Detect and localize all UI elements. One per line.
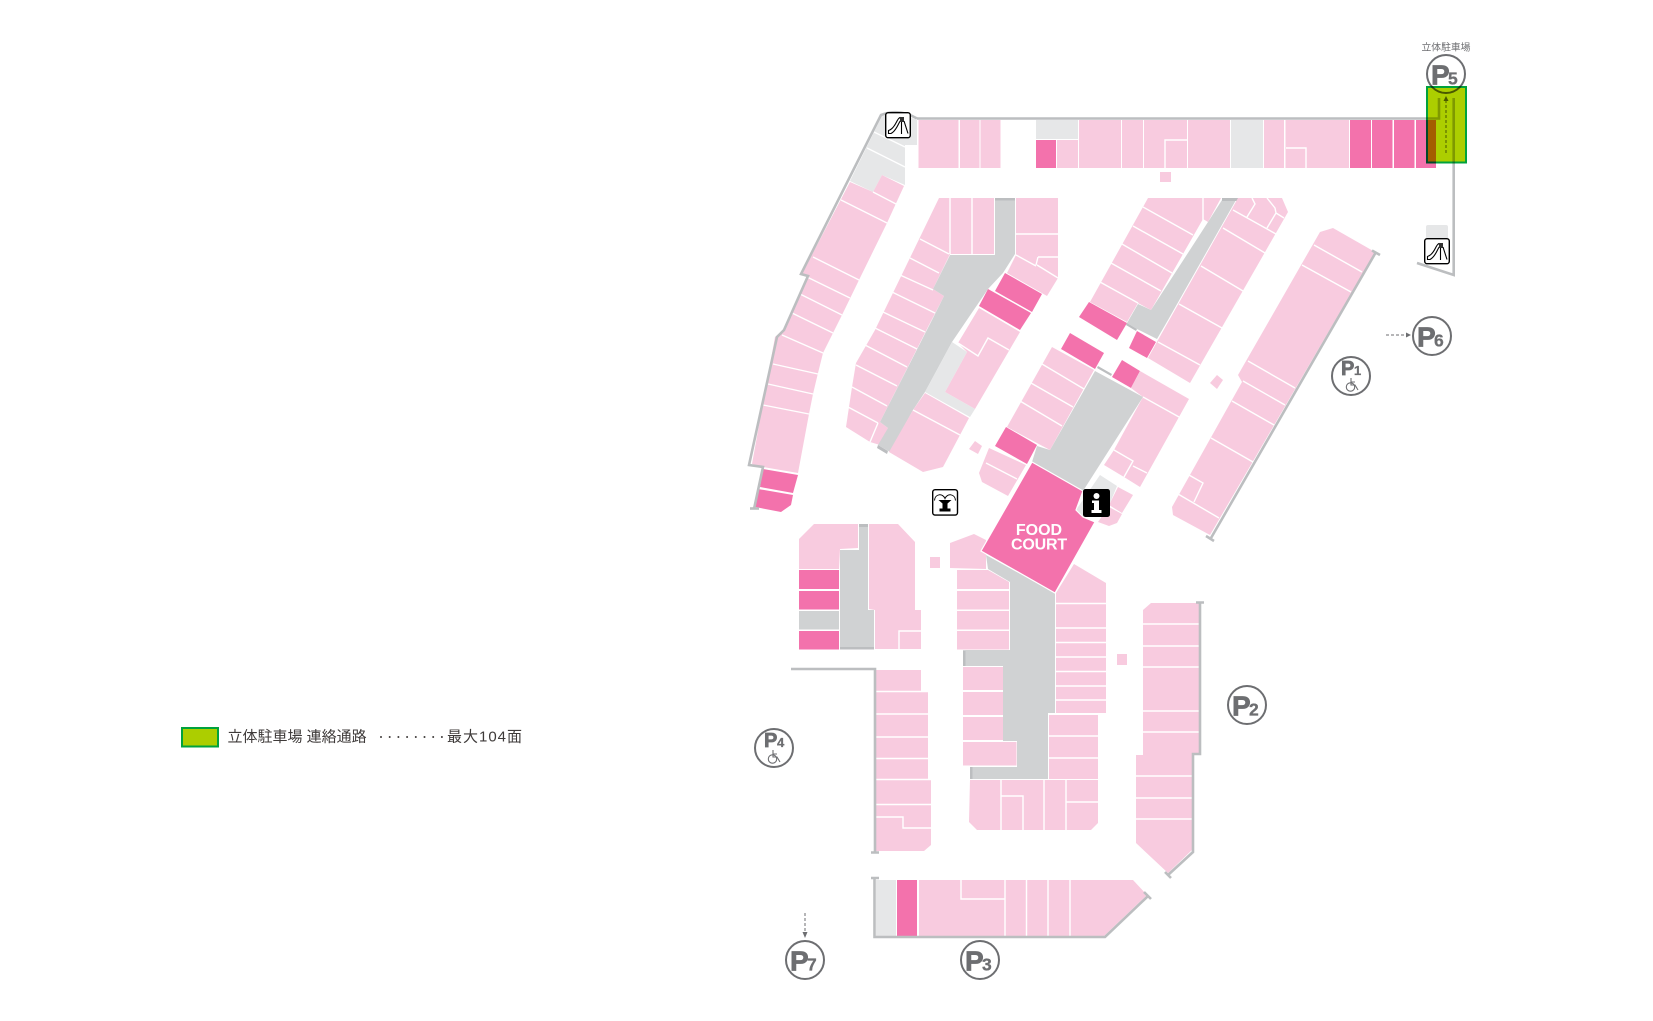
food court: [981, 462, 1095, 593]
legend: 立体駐車場 連絡通路: [228, 728, 367, 746]
right wing shops: [1172, 228, 1375, 535]
food court: FOOD: [1016, 522, 1062, 539]
sign: P5: P: [1431, 60, 1450, 90]
sign: P7: [786, 941, 824, 979]
icon: escalator east: [1425, 239, 1449, 264]
icon: information: [1083, 489, 1110, 517]
sign: P5: [1427, 55, 1465, 93]
left wing shops: [752, 112, 917, 512]
sign: P3: 3: [982, 954, 992, 974]
sign: P1 with wheelchair: [1332, 357, 1370, 395]
upper centre-right block: [979, 198, 1288, 496]
sign: P2: P: [1232, 690, 1251, 722]
east block: [1136, 603, 1199, 873]
sign: P2: [1228, 686, 1266, 724]
icon: fountain: [933, 490, 958, 515]
sign: P3: P: [965, 946, 984, 976]
arrow to P5: [1444, 96, 1448, 153]
sign: P1 with wheelchair: P: [1341, 358, 1354, 380]
P5 multi-storey car park label: 立体駐車場: [1422, 40, 1471, 54]
sign: P5: 5: [1448, 68, 1458, 88]
food court: COURT: [1011, 536, 1067, 554]
lower-left block: [799, 524, 940, 650]
south centre block: [950, 534, 1127, 830]
south strip: [876, 880, 1147, 936]
sign: P4 with wheelchair: [755, 729, 793, 767]
sign: P2: 2: [1249, 700, 1259, 720]
arrow to P6: [1386, 332, 1411, 338]
icon: escalator north-west: [886, 113, 910, 138]
legend: 最大104面: [447, 728, 522, 746]
information area: [1076, 475, 1133, 526]
upper centre-left block: [846, 198, 1058, 472]
legend: [182, 728, 522, 746]
building walls: [749, 98, 1454, 937]
sign: P3: [961, 941, 999, 979]
sign: P7: 7: [807, 954, 817, 974]
green connecting passage: [1427, 87, 1466, 162]
sign: P4 with wheelchair: P: [764, 730, 777, 752]
sign: P6: 6: [1434, 330, 1444, 350]
sign: P1 with wheelchair: 1: [1354, 363, 1361, 378]
arrow to P7: [802, 913, 808, 938]
top strip of shops: [918, 120, 1436, 182]
sign: P6: [1413, 317, 1451, 355]
light gray lift area: [1426, 225, 1448, 241]
sign: P6: P: [1417, 322, 1436, 352]
sign: P7: P: [790, 946, 809, 976]
west block: [876, 670, 931, 851]
sign: P4 with wheelchair: 4: [777, 735, 785, 750]
